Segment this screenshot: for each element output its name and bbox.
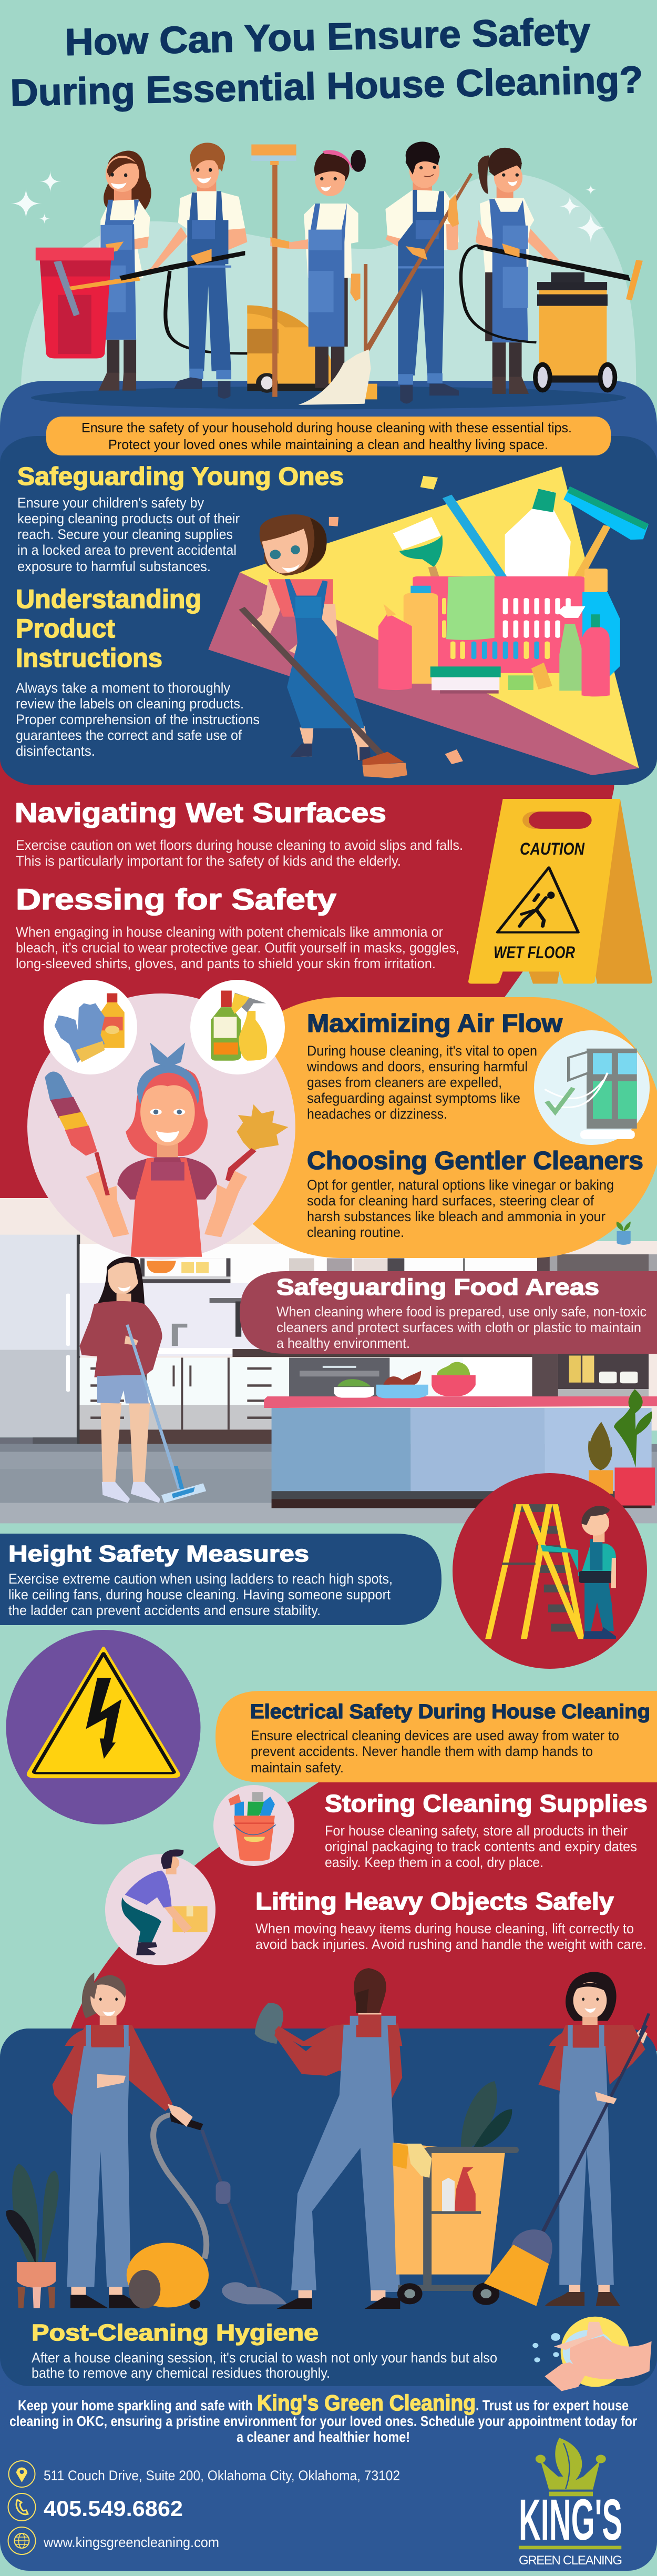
person 5 and yellow vacuum bbox=[461, 148, 643, 394]
section: choosing gentler cleaners: cleaning routine. bbox=[307, 1224, 404, 1240]
contact details: 511 Couch Drive, Suite 200, Oklahoma City, Oklahoma, 73102 bbox=[44, 2468, 400, 2483]
contact details: 405.549.6862 bbox=[44, 2496, 183, 2521]
person 1 bbox=[98, 150, 151, 391]
right worker with broom bbox=[484, 2025, 648, 2306]
title: During Essential House Cleaning? bbox=[10, 59, 643, 114]
closing message: Keep your home sparkling and safe with bbox=[18, 2397, 253, 2413]
section: choosing gentler cleaners: soda for cleaning hard surfaces, steering clear of bbox=[307, 1193, 594, 1209]
right woman head bbox=[566, 1972, 617, 2029]
closing message: King's Green Cleaning bbox=[257, 2390, 476, 2415]
upper shelf bbox=[140, 1258, 230, 1283]
section: height safety measures: the ladder can prevent accidents and ensure stability. bbox=[8, 1603, 321, 1618]
contact details bbox=[8, 2461, 400, 2554]
section: understanding product instructions: guarantees the correct and safe use of bbox=[16, 727, 242, 743]
potted plants bbox=[588, 1389, 655, 1506]
section: dressing for safety: Dressing for Safety bbox=[16, 883, 336, 916]
section: understanding product instructions: Proper comprehension of the instructions bbox=[16, 712, 260, 727]
floor shadow ellipse bbox=[31, 386, 626, 409]
section: safeguarding food areas: cleaners and protect surfaces with cloth or plastic to maintain bbox=[276, 1320, 641, 1335]
section: lifting heavy objects: Lifting Heavy Objects Safely bbox=[255, 1888, 614, 1915]
footer panel bbox=[0, 2029, 657, 2571]
fridge bbox=[0, 1235, 80, 1444]
section: electrical safety: maintain safety. bbox=[251, 1760, 344, 1776]
left plant bbox=[6, 2164, 59, 2308]
section: navigating wet surfaces: Navigating Wet Surfaces bbox=[15, 798, 386, 828]
cleaning cart bbox=[393, 2081, 519, 2305]
section: choosing gentler cleaners bbox=[307, 1147, 643, 1240]
section: maximizing air flow: gases from cleaners are expelled, bbox=[307, 1074, 502, 1090]
section: choosing gentler cleaners: harsh substances like bleach and ammonia in your bbox=[307, 1209, 605, 1224]
icon: caution wet floor sign: WET FLOOR bbox=[494, 943, 575, 962]
illustration: team heads above panel bbox=[65, 1968, 650, 2046]
icon: location bbox=[8, 2461, 35, 2487]
section: understanding product instructions: Product bbox=[16, 614, 115, 643]
intro pill: Ensure the safety of your household during house cleaning with these essential tips. bbox=[81, 420, 572, 435]
window icon bbox=[534, 1030, 650, 1145]
section: safeguarding young ones bbox=[17, 463, 344, 574]
left duster bbox=[45, 1071, 74, 1101]
section: electrical safety: prevent accidents. Never handle them with damp hands to bbox=[251, 1743, 593, 1759]
woman mopping bbox=[79, 1256, 206, 1503]
person 4 with mop bbox=[299, 141, 473, 405]
closing message bbox=[9, 2390, 637, 2445]
section: dressing for safety: long-sleeved shirts, gloves, and pants to shield your skin from irritation. bbox=[16, 956, 436, 971]
sparkles bbox=[11, 170, 607, 244]
section: lifting heavy objects: When moving heavy items during house cleaning, lift correctly to bbox=[255, 1921, 634, 1936]
illustration: team cleaning bbox=[6, 2025, 648, 2309]
left woman head bbox=[82, 1972, 126, 2029]
title bbox=[10, 11, 643, 114]
orange panel for air flow and gentler cleaners bbox=[210, 997, 657, 1258]
icon: phone bbox=[8, 2493, 36, 2521]
section: safeguarding young ones: Safeguarding Young Ones bbox=[17, 463, 344, 491]
closing message: . Trust us for expert house bbox=[476, 2397, 629, 2413]
section: height safety measures bbox=[0, 1534, 442, 1625]
person 2 bbox=[69, 143, 247, 399]
section: maximizing air flow: Maximizing Air Flow bbox=[307, 1010, 563, 1038]
illustration: woman sweeping with cleaning supplies bbox=[208, 466, 649, 778]
middle man head bbox=[255, 1968, 386, 2044]
red background lower section bbox=[63, 1782, 657, 2051]
section: understanding product instructions bbox=[16, 584, 260, 759]
panel: dressing illustration circles bbox=[27, 980, 657, 1260]
spray bottles icon bbox=[190, 980, 285, 1074]
section: dressing for safety: bleach, it's crucial to wear protective gear. Outfit yourself in masks, goggles, bbox=[16, 940, 459, 956]
blue band under hero bbox=[0, 381, 657, 579]
section: safeguarding food areas: a healthy environment. bbox=[276, 1335, 410, 1351]
section: storing cleaning supplies bbox=[325, 1790, 648, 1870]
woman circle bbox=[27, 993, 295, 1260]
closing message: a cleaner and healthier home! bbox=[237, 2429, 410, 2445]
section: safeguarding food areas: Safeguarding Food Areas bbox=[276, 1274, 599, 1300]
section: navigating wet surfaces bbox=[15, 798, 463, 869]
section: maximizing air flow: windows and doors, ensuring harmful bbox=[306, 1059, 528, 1074]
intro pill bbox=[46, 417, 611, 455]
section: navigating wet surfaces: Exercise caution on wet floors during house cleaning to avoid slips and falls. bbox=[16, 837, 463, 853]
panel: safeguarding and instructions bbox=[0, 436, 657, 785]
mauve shape bbox=[208, 572, 639, 775]
section: safeguarding young ones: Ensure your children's safety by bbox=[17, 495, 204, 511]
section: safeguarding young ones: keeping cleaning products out of their bbox=[17, 511, 240, 526]
section: electrical safety bbox=[215, 1691, 657, 1782]
panel: post-cleaning hygiene: bathe to remove any chemical residues thoroughly. bbox=[32, 2365, 330, 2381]
section: maximizing air flow: safeguarding against symptoms like bbox=[307, 1090, 520, 1106]
red bucket bbox=[36, 248, 114, 358]
gloves and bottle icon bbox=[44, 980, 137, 1074]
heading and text: Post-Cleaning Hygiene bbox=[32, 2320, 319, 2346]
icon: man with ladder in red circle bbox=[453, 1473, 647, 1669]
section: understanding product instructions: Always take a moment to thoroughly bbox=[16, 680, 230, 696]
section: maximizing air flow: headaches or dizziness. bbox=[307, 1106, 447, 1122]
hero illustration: cleaning team bbox=[11, 141, 643, 409]
section: storing cleaning supplies: original packaging to track contents and expiry dates bbox=[325, 1839, 637, 1854]
section: understanding product instructions: Understanding bbox=[16, 584, 201, 614]
section: lifting heavy objects bbox=[255, 1888, 646, 1952]
floor bbox=[0, 1444, 657, 1523]
logo: King's Green Cleaning: GREEN CLEANING bbox=[519, 2553, 622, 2568]
supplies bbox=[378, 486, 649, 696]
lower cabinets bbox=[79, 1357, 532, 1444]
section: storing cleaning supplies: Storing Cleaning Supplies bbox=[325, 1790, 648, 1817]
vacuum centre bbox=[166, 271, 333, 393]
section: safeguarding young ones: in a locked area to prevent accidental bbox=[17, 542, 237, 558]
section: choosing gentler cleaners: Choosing Gentler Cleaners bbox=[307, 1147, 643, 1175]
section: height safety measures: like ceiling fans, during house cleaning. Having someone support bbox=[8, 1587, 391, 1603]
kitchen wall background bbox=[0, 1198, 657, 1431]
icon: caution wet floor sign: CAUTION bbox=[520, 839, 585, 858]
icon: washing hands bbox=[532, 2317, 652, 2391]
section: maximizing air flow bbox=[306, 1010, 563, 1122]
icon: globe bbox=[8, 2527, 36, 2554]
middle worker bbox=[274, 2025, 402, 2309]
wall and tiles bbox=[79, 1244, 657, 1356]
section: understanding product instructions: review the labels on cleaning products. bbox=[16, 696, 244, 712]
section: electrical safety: Electrical Safety During House Cleaning bbox=[250, 1701, 650, 1723]
red background band: wet surfaces section bbox=[0, 757, 616, 1210]
section: electrical safety: Ensure electrical cleaning devices are used away from water to bbox=[251, 1728, 619, 1743]
yellow triangle bbox=[240, 466, 639, 768]
contact details: www.kingsgreencleaning.com bbox=[43, 2534, 219, 2550]
top shoulders bbox=[65, 2026, 140, 2046]
woman sweeping bbox=[239, 514, 407, 778]
icon: caution wet floor sign bbox=[468, 799, 652, 983]
title: How Can You Ensure Safety bbox=[65, 11, 591, 64]
section: safeguarding food areas bbox=[240, 1271, 657, 1354]
right shelf bbox=[532, 1354, 649, 1397]
section: navigating wet surfaces: This is particularly important for the safety of kids and the elderly. bbox=[16, 853, 401, 869]
panel: post-cleaning hygiene: After a house cleaning session, it's crucial to wash not only your hands but also bbox=[32, 2350, 497, 2366]
broom and person 3 bbox=[251, 145, 366, 397]
intro pill: Protect your loved ones while maintaining a clean and healthy living space. bbox=[108, 437, 548, 452]
illustration: kitchen scene bbox=[0, 1235, 657, 1523]
section: understanding product instructions: Instructions bbox=[16, 643, 162, 673]
section: safeguarding young ones: exposure to harmful substances. bbox=[17, 559, 211, 574]
bowls of food bbox=[334, 1362, 476, 1398]
section: dressing for safety: When engaging in house cleaning with potent chemicals like ammonia or bbox=[16, 924, 443, 940]
small plant bbox=[617, 1222, 631, 1245]
hero background hills bbox=[21, 174, 636, 391]
section: choosing gentler cleaners: Opt for gentler, natural options like vinegar or baking bbox=[307, 1177, 614, 1193]
panel: post-cleaning hygiene bbox=[0, 1968, 657, 2386]
section: height safety measures: Height Safety Measures bbox=[8, 1541, 309, 1567]
icon: person lifting box circle bbox=[105, 1849, 215, 1965]
kitchen island bbox=[264, 1396, 657, 1508]
section: height safety measures: Exercise extreme caution when using ladders to reach high spots, bbox=[8, 1571, 393, 1587]
section: safeguarding young ones: reach. Secure your cleaning supplies bbox=[17, 526, 233, 542]
woman with dusters bbox=[45, 1042, 288, 1257]
logo: King's Green Cleaning bbox=[519, 2438, 622, 2568]
left worker bbox=[53, 2025, 172, 2308]
section: maximizing air flow: During house cleaning, it's vital to open bbox=[307, 1043, 537, 1059]
section: understanding product instructions: disinfectants. bbox=[16, 743, 95, 759]
section: storing cleaning supplies: For house cleaning safety, store all products in their bbox=[325, 1823, 628, 1839]
vacuum cleaner bbox=[127, 2104, 287, 2309]
right duster bbox=[237, 1104, 288, 1151]
sink bbox=[142, 1298, 534, 1357]
icon: electrical warning triangle in purple circle bbox=[6, 1630, 201, 1824]
section: storing cleaning supplies: easily. Keep them in a cool, dry place. bbox=[325, 1854, 543, 1870]
section: dressing for safety bbox=[16, 883, 459, 971]
icon: cleaning bucket circle bbox=[213, 1785, 294, 1866]
